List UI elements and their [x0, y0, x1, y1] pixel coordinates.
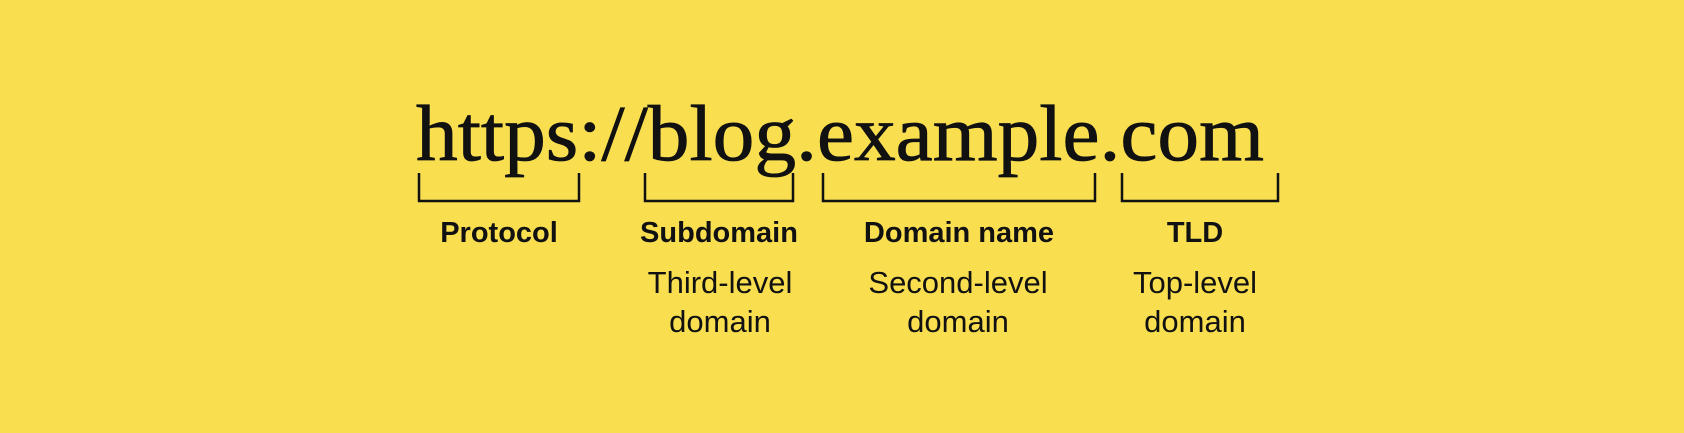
bracket: TLD [1122, 173, 1278, 201]
label: domain name: Second-level [868, 265, 1048, 300]
label: subdomain: domain [669, 304, 771, 339]
label: subdomain: Third-level [648, 265, 792, 300]
bracket: domain name [823, 173, 1095, 201]
label: domain name: domain [907, 304, 1009, 339]
title: example URL: https://blog.example.com [416, 91, 1264, 178]
brackets [419, 173, 1278, 201]
label: TLD: Top-level [1133, 265, 1257, 300]
label: TLD: TLD [1167, 217, 1223, 249]
label: domain name [864, 217, 1054, 339]
label: subdomain [640, 217, 798, 339]
label: TLD: domain [1144, 304, 1246, 339]
bracket: subdomain [645, 173, 793, 201]
label: TLD [1133, 217, 1257, 339]
label: domain name: Domain name [864, 217, 1054, 249]
bracket: protocol [419, 173, 579, 201]
label: subdomain: Subdomain [640, 217, 798, 249]
label: protocol: Protocol [440, 217, 558, 249]
